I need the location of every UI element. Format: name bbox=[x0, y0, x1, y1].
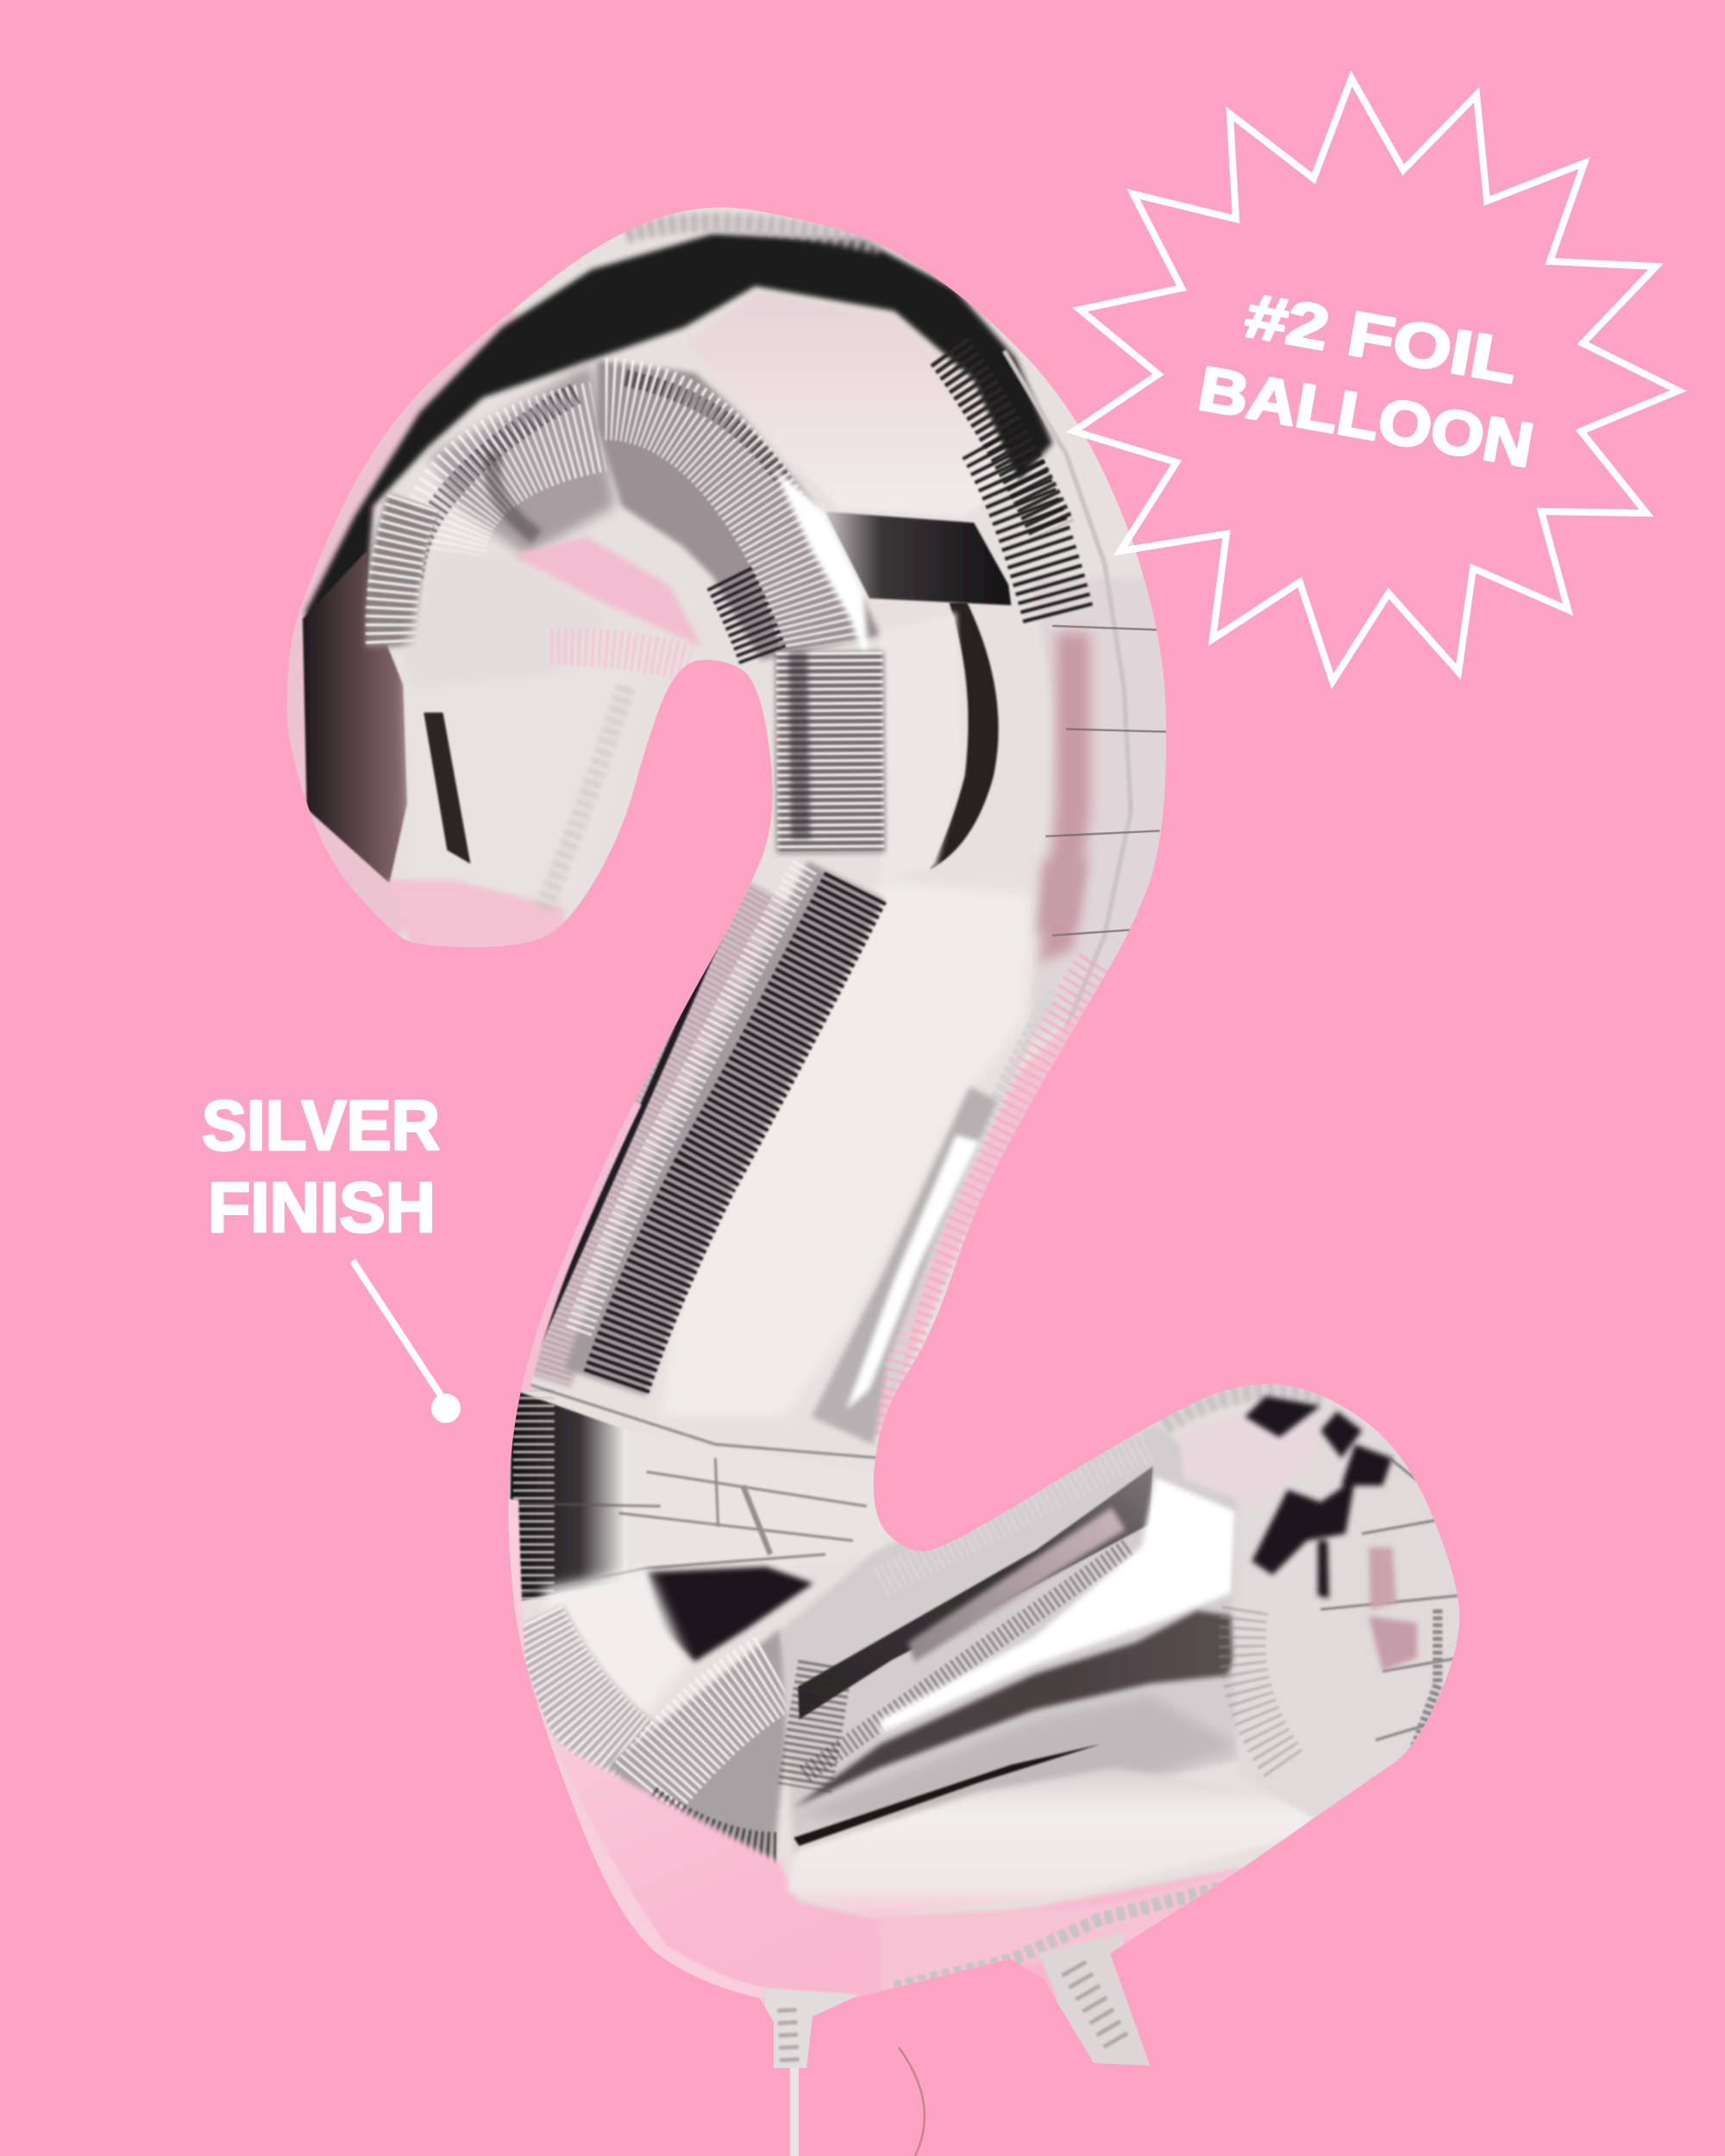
foil base bbox=[275, 192, 1486, 2090]
round end silver bbox=[1232, 1389, 1472, 1822]
body streak bbox=[812, 1087, 997, 1445]
leg lower rib stripes bbox=[805, 1664, 825, 1789]
lobe right crinkle bbox=[543, 688, 626, 908]
lower pink zone bbox=[506, 1685, 1242, 2018]
lower fan bbox=[608, 1628, 794, 1859]
waist creases bbox=[511, 1382, 881, 1595]
balloon: silver number 2 bbox=[275, 192, 1486, 2090]
pink reflection bbox=[513, 536, 701, 647]
dark reflection patch bbox=[825, 511, 1011, 605]
foot bbox=[1038, 1933, 1156, 2070]
callout text: silver finish: SILVER bbox=[202, 1087, 440, 1165]
badge: starburst outline bbox=[1074, 78, 1678, 681]
leg rib diagonal bbox=[805, 1547, 1128, 1775]
top edge crinkle bbox=[626, 222, 881, 245]
foot crinkle bbox=[1073, 1967, 1121, 2050]
round end top crinkle bbox=[1163, 1388, 1323, 1424]
curved dark stripe bbox=[930, 603, 999, 869]
callout text: silver finish: FINISH bbox=[208, 1169, 436, 1247]
tail pink bbox=[881, 1871, 1239, 1995]
dark upper band bbox=[302, 229, 1056, 618]
round end dark bbox=[1245, 1396, 1392, 1598]
white highlight leg bbox=[881, 1477, 1235, 1733]
body ribs dark bbox=[578, 867, 856, 1382]
neck light panel bbox=[881, 612, 963, 881]
foil rim mid bbox=[520, 1100, 633, 1389]
pink strip bbox=[1040, 633, 1089, 962]
leg dark band upper bbox=[798, 1466, 1153, 1720]
leg dark band lower bbox=[794, 1611, 1256, 1808]
lobe vertical dark stripe bbox=[423, 712, 470, 864]
lobe silver inner bbox=[406, 550, 605, 688]
leg silver bbox=[780, 1424, 1293, 1854]
round end top pink bbox=[1179, 1403, 1323, 1507]
pink panel neck right bbox=[1038, 860, 1087, 936]
badge text: BALLOON bbox=[1194, 354, 1539, 480]
bottom dark streak bbox=[794, 1744, 1101, 1846]
ribbed arch right bbox=[597, 360, 881, 661]
body ribs outer bbox=[530, 894, 770, 1376]
badge text: #2 FOIL bbox=[1240, 281, 1522, 397]
seam ties bbox=[1045, 626, 1167, 936]
waist dark reflection bbox=[647, 1567, 813, 1662]
round end seam bbox=[1369, 1609, 1438, 1808]
edge pink patch lower bbox=[1369, 1616, 1417, 1671]
nozzle crinkle bbox=[787, 2009, 790, 2063]
white highlight bbox=[773, 467, 869, 674]
balloon string bbox=[794, 2047, 925, 2156]
leg lilac line bbox=[908, 1507, 1126, 1662]
foil rim lower bbox=[509, 1500, 763, 1997]
circle ribs bbox=[1242, 1609, 1286, 1768]
seam line bbox=[963, 351, 1131, 1211]
small ribs left bbox=[392, 502, 412, 647]
foil rim pink bbox=[296, 323, 523, 936]
waist dark ribs bbox=[509, 1389, 627, 1602]
neck ribs bbox=[798, 652, 831, 853]
lower left ribs bbox=[527, 1623, 661, 1775]
callout text: silver finish bbox=[202, 1087, 440, 1247]
pink striations at hole bbox=[550, 647, 688, 663]
nozzle bbox=[763, 1988, 860, 2074]
silver shade bbox=[794, 1695, 1239, 1822]
belly bbox=[787, 1768, 1376, 1917]
leg top ribs bbox=[881, 1445, 1149, 1582]
crinkle seam bbox=[892, 990, 1052, 1389]
callout pointer bbox=[353, 1261, 461, 1423]
lower left light area bbox=[543, 1568, 688, 1761]
right seam dark ribs upper bbox=[950, 351, 1059, 619]
right panel strip bbox=[1025, 578, 1183, 1045]
ribbed arch left bbox=[412, 363, 615, 578]
lobe light area bbox=[398, 680, 408, 819]
edge panels bbox=[1320, 1458, 1461, 1740]
edge pink patches bbox=[1369, 1547, 1396, 1609]
lobe lower pink bbox=[388, 881, 564, 950]
left lobe dark reflection bbox=[303, 550, 407, 883]
body right pink crinkle bbox=[860, 990, 1101, 1445]
head highlight bbox=[688, 291, 1018, 516]
tail crinkle bbox=[894, 1882, 1245, 1988]
waist band bbox=[627, 1431, 888, 1582]
body light bbox=[661, 881, 1032, 1417]
badge text bbox=[1194, 281, 1539, 480]
